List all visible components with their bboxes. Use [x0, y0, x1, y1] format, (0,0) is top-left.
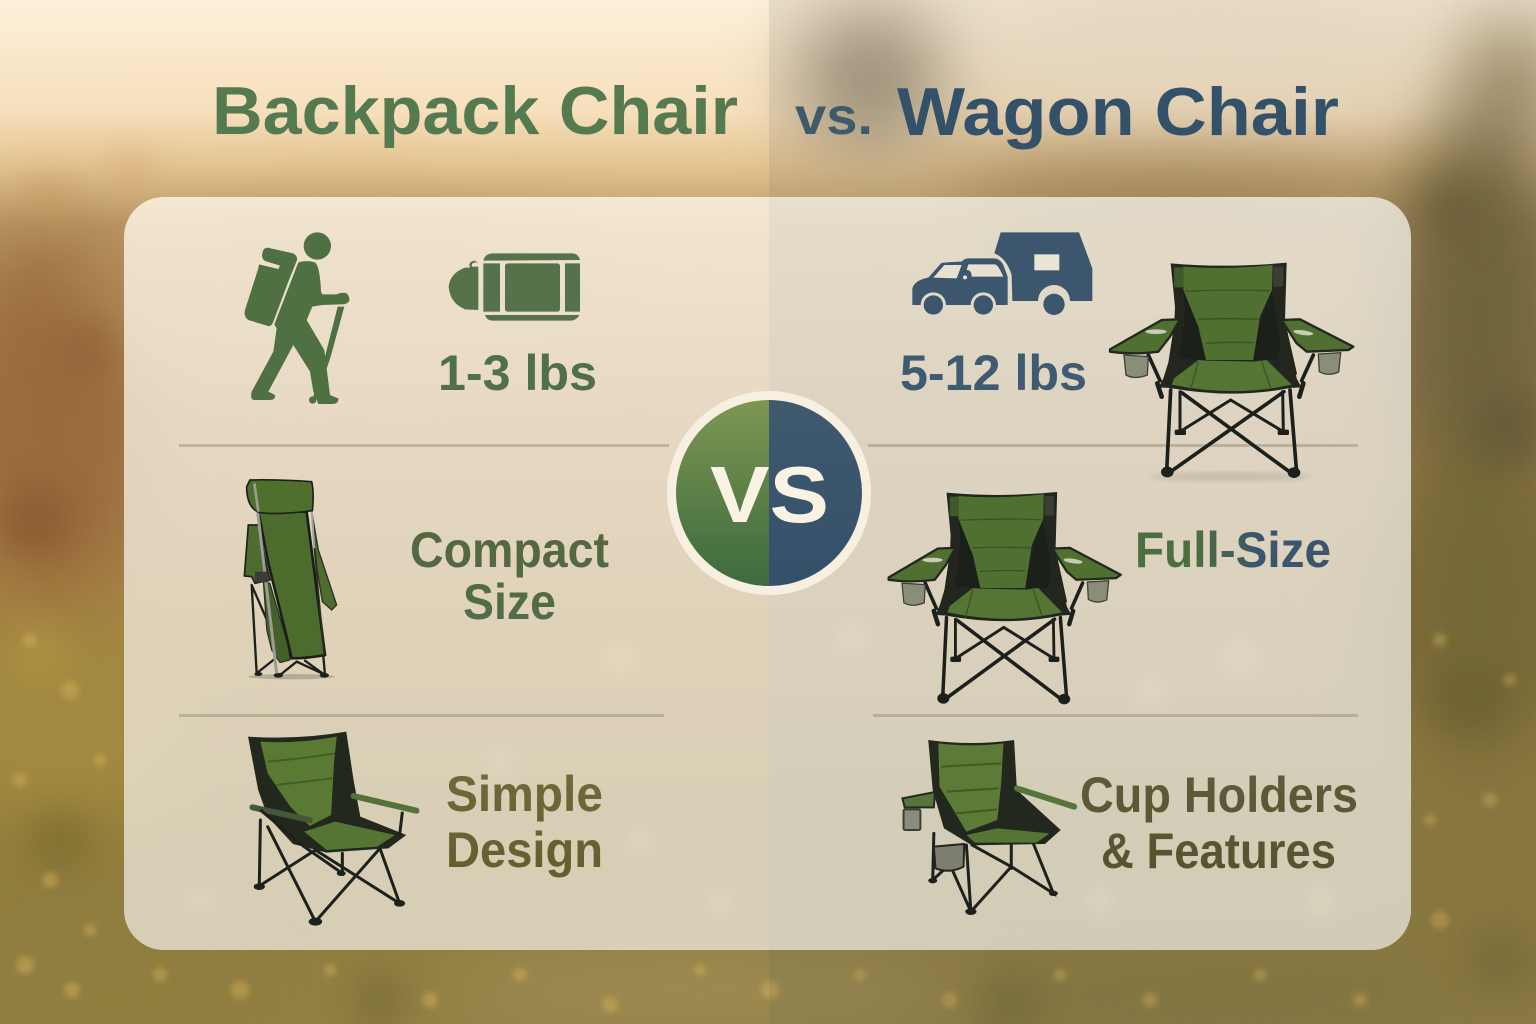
icon: packed chair bag: [449, 253, 580, 321]
text: Simple Design: Simple: [446, 766, 603, 822]
badge: VS: [667, 391, 871, 595]
text: Cup Holders & Features: [1080, 767, 1358, 879]
photo: folded backpack chair: [244, 480, 337, 679]
text: 1-3 lbs: 1-3 lbs: [438, 345, 597, 401]
title: vs.: vs.: [795, 88, 873, 146]
text: Compact Size: Compact: [410, 522, 609, 578]
title: Wagon Chair: Wagon Chair: [897, 74, 1339, 150]
icon: truck towing camper: [912, 232, 1092, 315]
text: Simple Design: Design: [446, 822, 603, 878]
icon: hiker with backpack: [245, 232, 349, 404]
photo: full-size wagon chair: [889, 492, 1121, 704]
text: Simple Design: [446, 766, 603, 878]
photo: simple design chair: [248, 732, 416, 926]
photo: wagon chair with cup holders: [1110, 263, 1353, 481]
photo: chair with cup holders and features: [902, 740, 1074, 915]
text: Cup Holders & Features: & Features: [1101, 823, 1336, 879]
text: Cup Holders & Features: Cup Holders: [1080, 767, 1358, 823]
text: Compact Size: Size: [463, 574, 556, 630]
panel: comparison card: [124, 197, 1411, 950]
text: 5-12 lbs: 5-12 lbs: [900, 345, 1087, 401]
text: Full-Size: Full-Size: [1135, 522, 1331, 578]
badge: VS: VS: [710, 450, 829, 539]
title: Backpack Chair: Backpack Chair: [212, 73, 738, 149]
text: Compact Size: [410, 522, 609, 630]
title: [212, 73, 1339, 150]
